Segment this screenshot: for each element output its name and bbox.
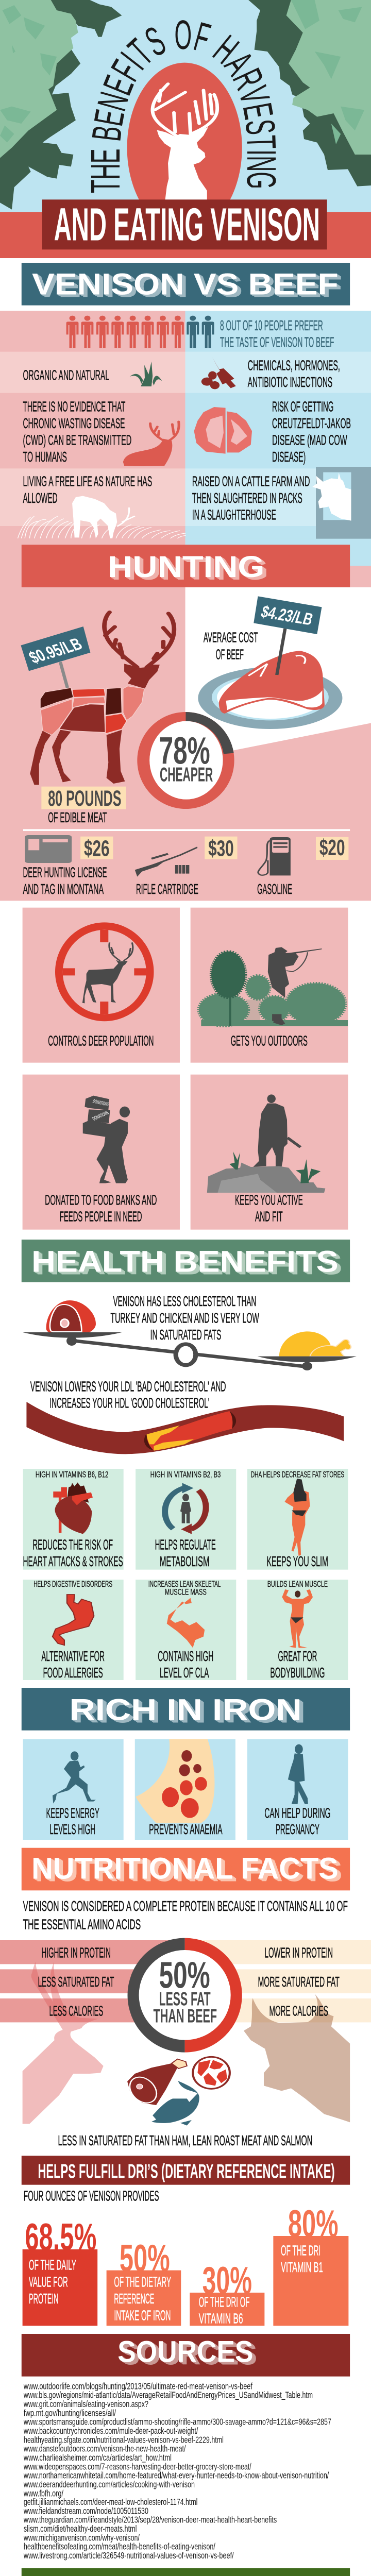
section: artery cholesterol [26, 1379, 344, 1454]
panel: venison vs beef comparison: LIVING A FREE LIFE AS NATURE HAS [23, 473, 152, 489]
icon: turkey [279, 1331, 351, 1357]
trees: left foliage [0, 0, 122, 210]
panel: vitamin cards: REDUCES THE RISK OF [32, 1537, 113, 1553]
card: keeps you slim [247, 1469, 348, 1570]
section: hunting: DEER HUNTING LICENSE [23, 864, 107, 880]
icon: person carrying donation boxes: DONATIONS [91, 1110, 110, 1122]
main title box [42, 199, 327, 249]
text: CONTROLS DEER POPULATION [48, 1032, 154, 1049]
section: nutritional comparison [0, 1898, 371, 2124]
icon: metabolism cycle [165, 1483, 206, 1534]
text: less cholesterol [110, 1293, 259, 1343]
icon: runner [53, 1751, 96, 1804]
icon: resting deer [123, 421, 179, 466]
text: donated to food banks [45, 1192, 157, 1225]
icon: hunter aiming [268, 947, 322, 998]
text: chemicals [248, 357, 340, 391]
panel: venison vs beef comparison: CHRONIC WASTING DISEASE [23, 415, 125, 432]
comparison bands [0, 1940, 371, 2022]
cost item: rifle cartridge: RIFLE CARTRIDGE [136, 881, 198, 897]
text: average cost of beef [204, 630, 258, 663]
panel: vitamin cards: HEART ATTACKS & STROKES [23, 1553, 123, 1570]
icon: venison ham [46, 1300, 96, 1333]
panel: venison vs beef comparison: (CWD) CAN BE TRANSMITTED [23, 432, 131, 448]
card: bodybuilding [247, 1580, 348, 1681]
preference caption [220, 317, 334, 350]
chart: 50 percent less fat ring: THAN BEEF [154, 2005, 217, 2027]
icon: round roast [193, 2057, 230, 2089]
text: less cholesterol: IN SATURATED FATS [150, 1327, 221, 1343]
section: hunting: OF BEEF [216, 646, 244, 663]
chart: 50 percent less fat ring: LESS FAT [159, 1988, 211, 2010]
card: energy [23, 1739, 124, 1840]
heading: produced by [22, 2568, 350, 2576]
section: saturated fat comparison [58, 2057, 312, 2149]
cost item: licence [23, 835, 113, 897]
card: pregnancy [247, 1739, 348, 1840]
text block: source links: getfit.jillianmichaels.com/deer-meat-low-cholesterol-1174.html [24, 2496, 197, 2507]
text: raised on cattle farm [192, 473, 310, 523]
section: DRI bar chart: OF THE DIETARY [114, 2274, 171, 2290]
icon: heart [53, 1482, 93, 1534]
illustration: cow in barn [312, 467, 371, 539]
bar: iron 50 percent [107, 2236, 181, 2326]
chart: 50 percent less fat ring: 50% [159, 1955, 210, 1996]
text: no evidence of CWD [23, 398, 131, 465]
trees: right foliage [248, 0, 371, 187]
red ellipse medallion [127, 63, 242, 233]
labels: venison column [38, 1944, 114, 2019]
bar: iron 50 percent: REFERENCE [114, 2291, 154, 2307]
icon: bodybuilder [282, 1589, 313, 1648]
text: lowers LDL [30, 1379, 226, 1411]
ground band [0, 526, 371, 539]
text: risk of CJD: DISEASE) [272, 449, 306, 465]
section: hunting: AVERAGE COST [204, 630, 258, 646]
text block: source links: www.fieldandstream.com/node/1005011530 [23, 2505, 148, 2516]
card: metabolism: HIGH IN VITAMINS B2, B3 [150, 1470, 221, 1479]
panel: vitamin cards: ALTERNATIVE FOR [41, 1648, 105, 1665]
card: heart [23, 1469, 124, 1570]
section: DRI bar chart: OF THE DRI OF [199, 2294, 249, 2310]
silhouette: deer [23, 1962, 104, 2124]
text block: source links: www.michiganvenison.com/why-venison/ [23, 2532, 140, 2543]
card: CLA: INCREASES LEAN SKELETAL [148, 1580, 221, 1589]
card: anaemia [135, 1739, 235, 1840]
comparison backgrounds [0, 311, 371, 624]
text: keeps you active: AND FIT [255, 1209, 283, 1225]
red ribbon band [0, 212, 371, 258]
text block: source links: www.grit.com/animals/eating-venison.aspx? [23, 2398, 148, 2409]
text block: source links: www.charliealsheimer.com/ca/articles/art_how.html [23, 2452, 172, 2463]
icon: person carrying donation boxes [83, 1096, 130, 1183]
panel: gets you outdoors [191, 908, 348, 1063]
chart: 78 percent cheaper ring: CHEAPER [160, 764, 213, 786]
bar: iron 50 percent: 50% [120, 2236, 170, 2279]
icon: grass [130, 362, 162, 386]
section: hunting: 80 POUNDS [48, 786, 122, 810]
icon: crosshair with deer [55, 922, 154, 1021]
heading: rich in iron: RICH IN IRON [70, 1693, 301, 1726]
text block: source links: www.deeranddeerhunting.com/articles/cooking-with-venison [23, 2479, 195, 2489]
hunting background [0, 566, 371, 901]
heading: sources: SOURCES [117, 2335, 253, 2368]
sky background [0, 0, 371, 223]
icon: plate with steak [198, 651, 342, 729]
panel: donated to food banks: FEEDS PEOPLE IN NEED [60, 1209, 142, 1225]
bar: vitamin B6 30 percent: VITAMIN B6 [199, 2310, 243, 2327]
section: cholesterol balance scale [23, 1293, 357, 1370]
text block: source links: www.backcountrychronicles.com/mule-deer-pack-out-weight/ [23, 2425, 198, 2436]
panel: iron benefits [23, 1739, 348, 1840]
panel: vitamin cards: FOOD ALLERGIES [43, 1665, 103, 1681]
cost item: licence: $26 [84, 836, 110, 861]
sign: venison price: $0.95/LB [25, 634, 86, 667]
people pictogram: 8 of 10 [66, 316, 214, 348]
bar: protein 68.5 percent: VALUE FOR [29, 2274, 68, 2290]
text: risk of CJD [272, 398, 351, 465]
icon: salmon [151, 2081, 199, 2126]
text block: source links: slism.com/diet/healthy-deer-meats.html [24, 2523, 137, 2534]
text: keeps you active [235, 1192, 303, 1225]
cost item: rifle cartridge [135, 836, 238, 897]
card: CLA [136, 1580, 236, 1681]
header: title banner [0, 0, 371, 258]
section: nutritional comparison: HIGHER IN PROTEIN [41, 1944, 111, 1961]
panel: keeps you active [191, 1075, 348, 1230]
text block: source links: fwp.mt.gov/hunting/licenses/all/ [24, 2408, 116, 2418]
icon: pregnant woman [288, 1744, 308, 1804]
icon: hiker standing on rock [207, 1094, 325, 1193]
text block: source links: www.fbfh.org/ [23, 2488, 64, 2498]
chart: 50 percent less fat ring [128, 1938, 242, 2053]
bar: protein 68.5 percent [23, 2215, 97, 2326]
text block: source links: www.danstefoutdoors.com/venison-the-new-health-meat/ [23, 2443, 186, 2454]
icon: slim woman [284, 1479, 310, 1556]
panel: donated to food banks [23, 1075, 180, 1230]
icon: brain cross-section [194, 407, 252, 454]
icon: stomach [53, 1595, 94, 1645]
bar: protein 68.5 percent: PROTEIN [29, 2291, 58, 2307]
text block: source links [23, 2381, 331, 2561]
card: CLA: MUSCLE MASS [165, 1588, 207, 1597]
text: complete protein: THE ESSENTIAL AMINO ACIDS [23, 1916, 141, 1933]
illustration: artery with plaque [26, 1402, 344, 1454]
heading: sources [22, 2334, 350, 2377]
card: food allergies [23, 1580, 124, 1681]
icon: balance scale [23, 1332, 357, 1370]
text: DONATED TO FOOD BANKS AND [45, 1192, 157, 1208]
sign: venison price [21, 626, 90, 688]
icon: arm muscle [167, 1598, 205, 1648]
icon: syringe and pills [201, 357, 236, 389]
text: complete protein [23, 1898, 348, 1933]
section: nutritional comparison: LESS CALORIES [49, 2003, 103, 2019]
illustration: deer with butcher cuts [30, 612, 174, 785]
silhouette: bull [244, 1994, 350, 2122]
chart: 78 percent cheaper ring: 78% [159, 729, 210, 772]
panel: iron benefits: KEEPS ENERGY [46, 1805, 99, 1821]
sign: beef price [254, 596, 322, 675]
heading: rich in iron [22, 1688, 350, 1731]
section: DRI bar chart [23, 2188, 348, 2327]
title arc text: THE BENEFITS OF HARVESTING [91, 20, 276, 193]
panel: venison vs beef comparison: THERE IS NO EVIDENCE THAT [23, 398, 125, 415]
callout: 80 pounds [41, 786, 126, 810]
card: energy: LEVELS HIGH [49, 1821, 95, 1838]
heading: hunting [22, 545, 350, 587]
chart: 78 percent cheaper ring [137, 712, 234, 809]
section: DRI bar chart: INTAKE OF IRON [114, 2307, 171, 2324]
cost item: gasoline: $20 [319, 836, 345, 860]
panel: venison vs beef comparison: ORGANIC AND NATURAL [23, 367, 109, 383]
text: living free: ALLOWED [23, 490, 58, 506]
bar: vitamin B6 30 percent: 30% [203, 2259, 252, 2301]
illustration: grazing deer in grass [18, 496, 185, 538]
text: living free [23, 473, 152, 506]
labels: beef column [258, 1944, 340, 2019]
bar: vitamin B1 80 percent [273, 2202, 348, 2326]
bar: protein 68.5 percent: OF THE DAILY [29, 2257, 76, 2273]
card: metabolism [136, 1469, 236, 1570]
icon: stag head [153, 84, 217, 202]
text: no evidence of CWD: TO HUMANS [23, 449, 67, 465]
section: DRI bar chart: 68.5% [25, 2215, 96, 2258]
heading: hunting: HUNTING [108, 550, 264, 583]
cost item: gasoline: GASOLINE [257, 881, 292, 897]
cost item: rifle cartridge: $30 [208, 836, 234, 861]
card: CLA: LEVEL OF CLA [160, 1665, 209, 1681]
icon: ham [125, 2059, 187, 2106]
panel: vitamin cards [23, 1469, 348, 1681]
cost item: gasoline [257, 836, 348, 897]
bar: vitamin B6 30 percent [190, 2259, 264, 2327]
icon: blood vessel with cells [136, 1739, 214, 1823]
panel: vitamin cards: HELPS REGULATE [155, 1537, 216, 1553]
panel: iron benefits: PREVENTS ANAEMIA [149, 1821, 223, 1838]
section: hunting: OF EDIBLE MEAT [48, 809, 107, 826]
card: CLA: CONTAINS HIGH [158, 1648, 213, 1665]
section: hunting [0, 545, 371, 901]
section: nutritional comparison: LESS SATURATED FAT [38, 1974, 114, 1990]
card: metabolism: METABOLISM [160, 1553, 209, 1570]
panel: controls deer population [23, 908, 180, 1063]
card: heart: HIGH IN VITAMINS B6, B12 [36, 1470, 108, 1479]
sign: beef price: $4.23/LB [259, 602, 315, 629]
section: hunting: AND TAG IN MONTANA [23, 881, 104, 897]
card: food allergies: HELPS DIGESTIVE DISORDERS [33, 1580, 112, 1589]
icon: bushes and tree [199, 952, 348, 1026]
icon: person carrying donation boxes: DONATIONS [92, 1098, 110, 1108]
panel: venison vs beef comparison [0, 311, 371, 624]
